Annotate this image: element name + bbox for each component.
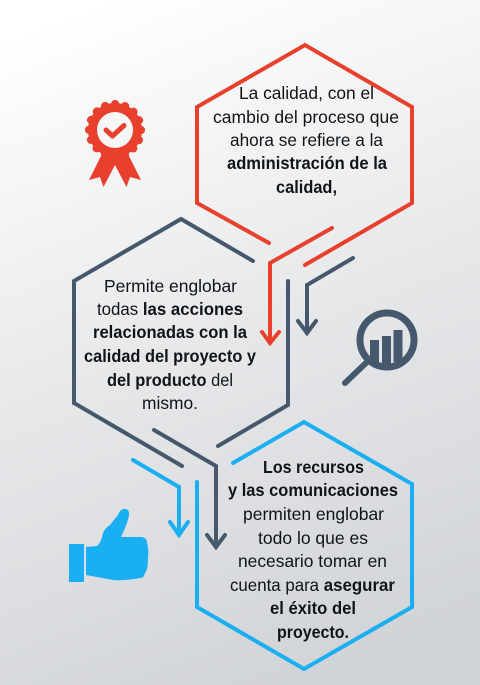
arrow: blue bbox=[133, 460, 188, 535]
text block: slate hexagon: del producto del bbox=[107, 370, 233, 390]
text block: slate hexagon: mismo. bbox=[142, 393, 198, 413]
text block: blue hexagon: necesario tomar en bbox=[238, 551, 387, 571]
text block: red hexagon: ahora se refiere a la bbox=[230, 130, 383, 150]
text block: red hexagon bbox=[213, 83, 399, 197]
arrow: slate long bbox=[154, 430, 225, 547]
text block: blue hexagon: el éxito del bbox=[270, 598, 356, 618]
panel: blue hexagon bbox=[197, 422, 412, 669]
text block: slate hexagon: Permite englobar bbox=[104, 276, 237, 296]
icon: magnifier with bars bbox=[345, 313, 414, 383]
text block: slate hexagon bbox=[84, 276, 256, 413]
arrow: red bbox=[262, 228, 332, 343]
text block: blue hexagon: permiten englobar bbox=[243, 504, 384, 524]
text block: red hexagon: calidad, bbox=[276, 177, 337, 197]
text block: red hexagon: cambio del proceso que bbox=[213, 107, 399, 127]
text block: slate hexagon: calidad del proyecto y bbox=[84, 346, 256, 366]
panel: slate hexagon bbox=[74, 219, 288, 466]
arrow: slate short bbox=[298, 258, 353, 333]
text block: red hexagon: La calidad, con el bbox=[239, 83, 374, 103]
text block: slate hexagon: relacionadas con la bbox=[93, 322, 247, 342]
panel: red hexagon bbox=[197, 45, 412, 265]
text block: blue hexagon bbox=[228, 457, 398, 642]
icon: thumbs up bbox=[69, 509, 148, 582]
text block: blue hexagon: cuenta para asegurar bbox=[230, 575, 395, 595]
text block: blue hexagon: Los recursos bbox=[263, 457, 364, 477]
text block: slate hexagon: todas las acciones bbox=[97, 299, 243, 319]
text block: blue hexagon: proyecto. bbox=[277, 622, 349, 642]
text block: red hexagon: administración de la bbox=[227, 153, 387, 173]
text block: blue hexagon: y las comunicaciones bbox=[228, 480, 398, 500]
icon: award rosette bbox=[88, 103, 142, 187]
text block: blue hexagon: todo lo que es bbox=[258, 528, 368, 548]
